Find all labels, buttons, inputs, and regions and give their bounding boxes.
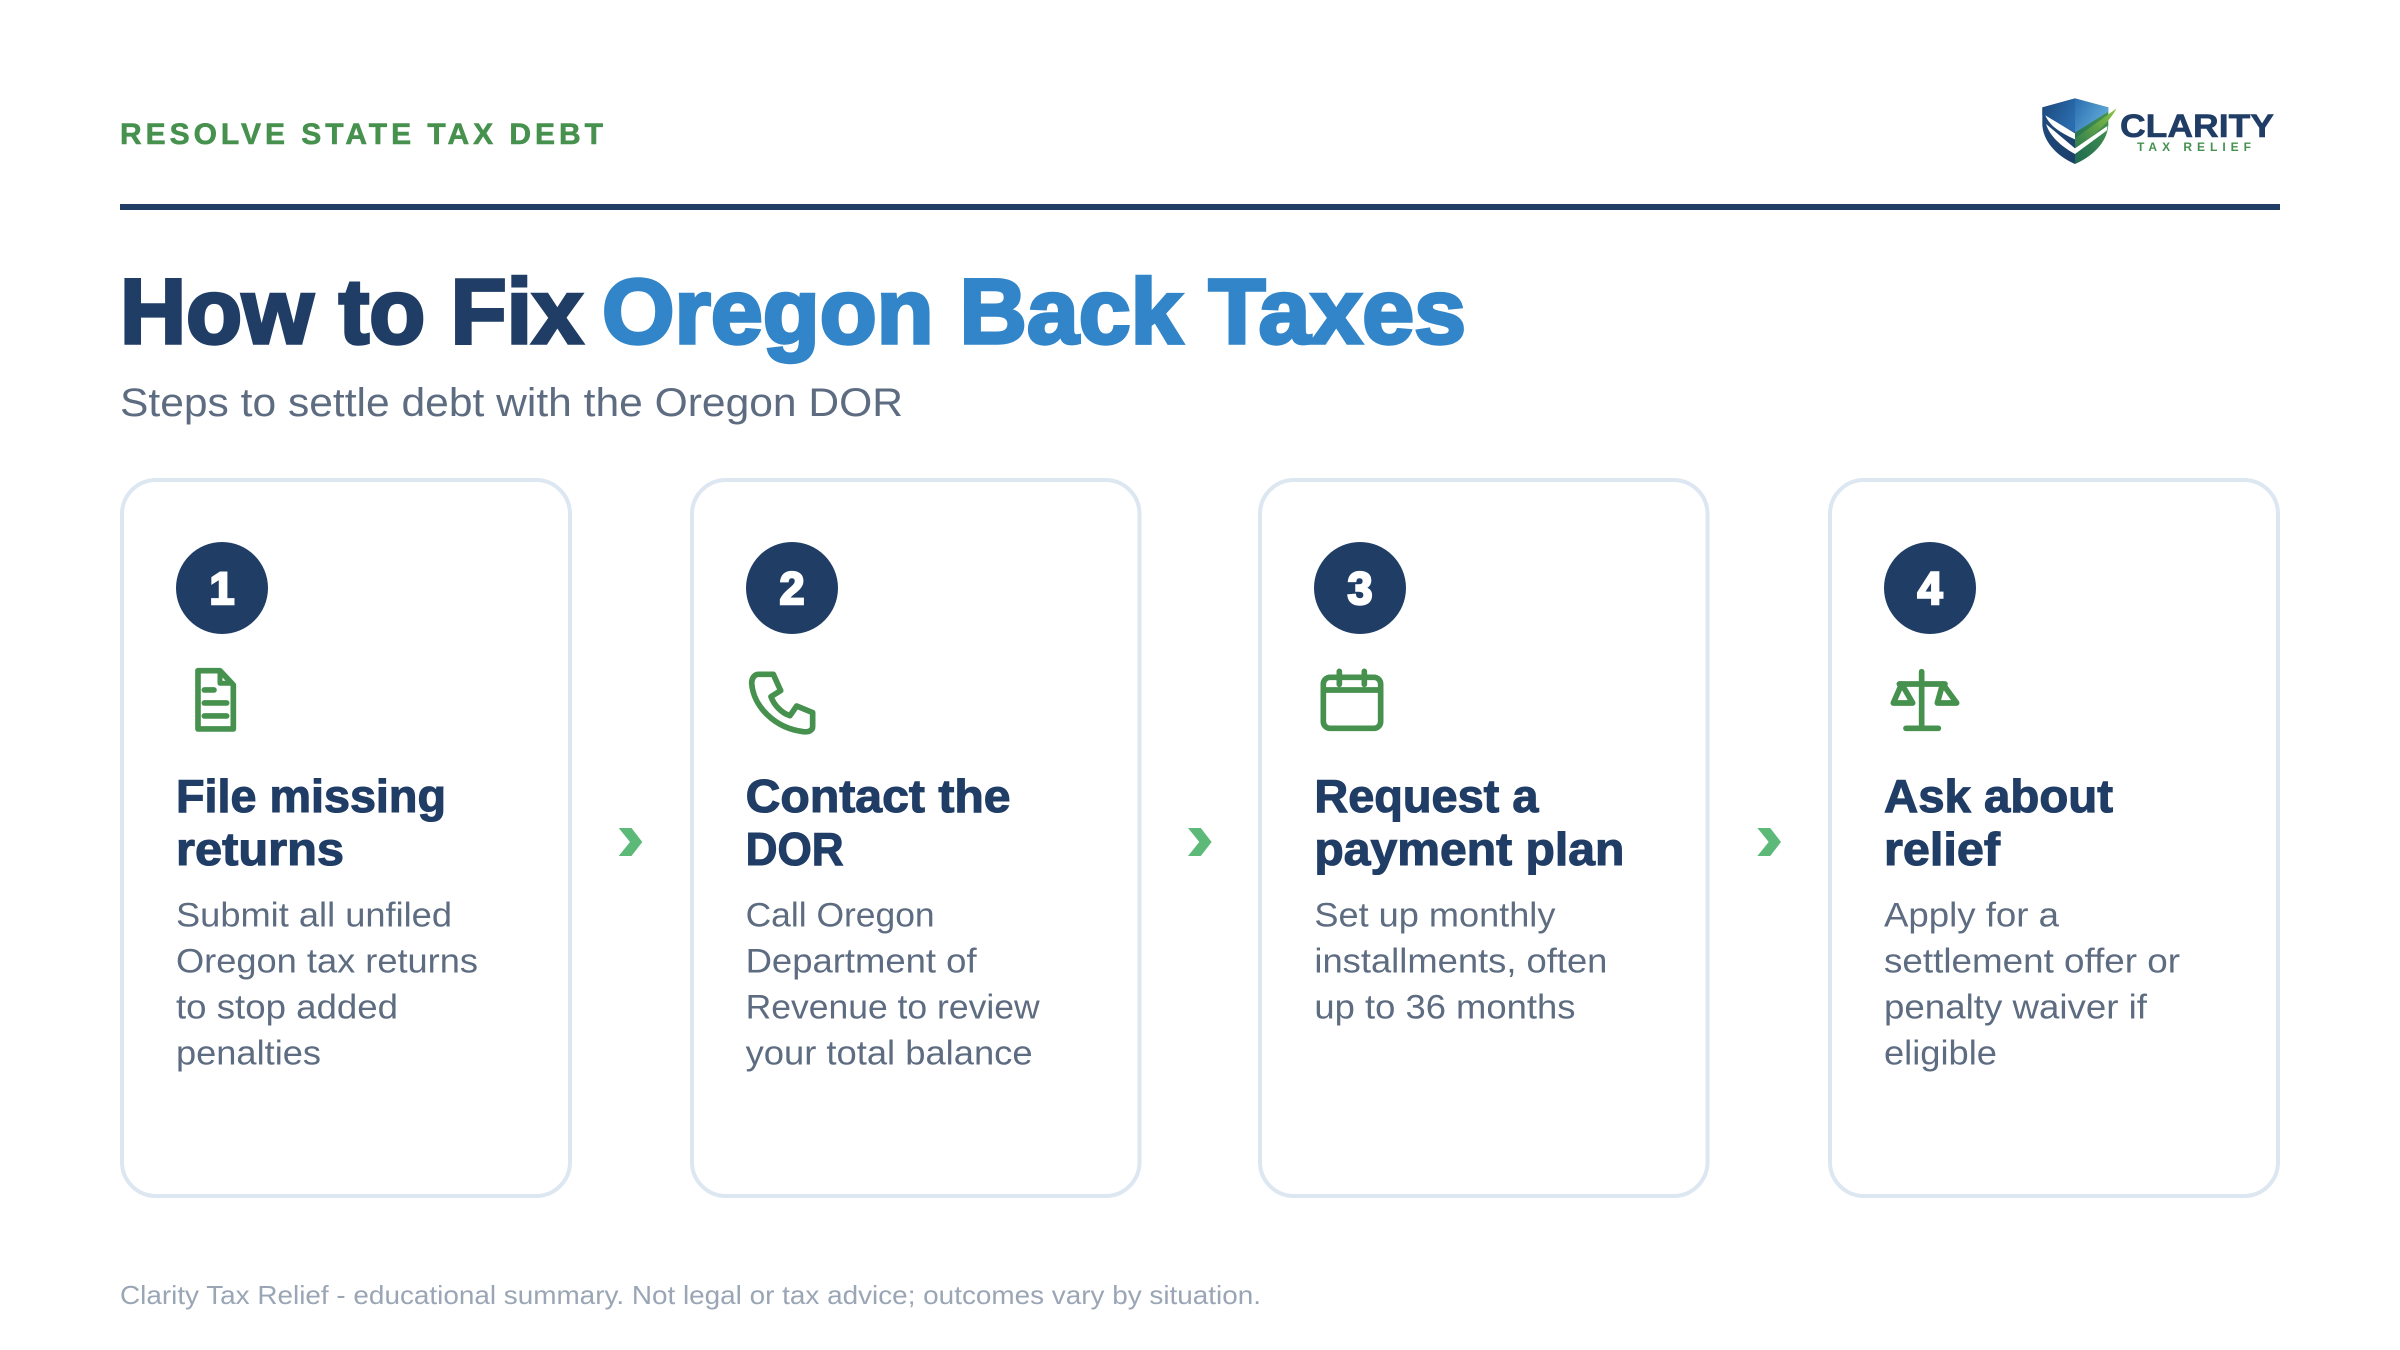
step 1 heading xyxy=(176,770,446,875)
panel: step 1 xyxy=(122,480,570,1196)
logo wordmark: CLARITY xyxy=(2120,108,2274,144)
panel: step 3 xyxy=(1260,480,1708,1196)
step 1 heading: returns xyxy=(176,823,344,875)
icon: phone xyxy=(752,674,813,732)
step 3 description xyxy=(1314,896,1607,1026)
step 3 description: Set up monthly xyxy=(1314,896,1555,934)
step 1 description: to stop added xyxy=(176,988,398,1026)
step 2 heading: Contact the xyxy=(746,770,1011,822)
step number 1 xyxy=(176,542,268,634)
step 2 heading: DOR xyxy=(746,823,844,875)
step 3 heading: Request a xyxy=(1314,770,1539,822)
arrow 2 xyxy=(1188,828,1212,856)
card outline xyxy=(692,480,1140,1196)
step 3 heading: payment plan xyxy=(1314,823,1624,875)
step 4 heading: Ask about xyxy=(1884,770,2113,822)
step 2 description xyxy=(746,896,1040,1072)
logo tagline: TAX RELIEF xyxy=(2137,140,2251,154)
step number 2 xyxy=(746,542,838,634)
title dark part: How to Fix xyxy=(120,261,583,363)
arrow 1 xyxy=(619,828,642,856)
step 3 description: installments, often xyxy=(1314,942,1607,980)
arrow 3 xyxy=(1757,828,1781,856)
card outline xyxy=(1830,480,2278,1196)
step 4 description: settlement offer or xyxy=(1884,942,2180,980)
step 4 heading xyxy=(1884,770,2113,875)
panel: step 2 xyxy=(692,480,1140,1196)
icon: shield with check xyxy=(2042,98,2117,164)
title xyxy=(120,261,1466,363)
step number 4: 4 xyxy=(1917,563,1943,614)
subtitle: Steps to settle debt with the Oregon DOR xyxy=(120,381,903,425)
step 2 description: Department of xyxy=(746,942,977,980)
icon: scales xyxy=(1893,672,1957,728)
step 1 description: penalties xyxy=(176,1034,321,1072)
logo: Clarity Tax Relief xyxy=(2042,98,2274,164)
icon: document xyxy=(198,671,233,729)
step 1 heading: File missing xyxy=(176,770,446,822)
icon: calendar xyxy=(1323,671,1381,728)
card outline xyxy=(122,480,570,1196)
title blue part: Oregon Back Taxes xyxy=(602,261,1466,363)
panel: step 4 xyxy=(1830,480,2278,1196)
step 1 description xyxy=(176,896,478,1072)
step number 3 xyxy=(1314,542,1406,634)
step 4 description: Apply for a xyxy=(1884,896,2059,934)
step 3 heading xyxy=(1314,770,1624,875)
step 1 description: Submit all unfiled xyxy=(176,896,452,934)
step number 1: 1 xyxy=(209,563,235,614)
step 3 description: up to 36 months xyxy=(1314,988,1575,1026)
step 4 description: penalty waiver if xyxy=(1884,988,2148,1026)
step number 4 xyxy=(1884,542,1976,634)
footer disclaimer: Clarity Tax Relief - educational summary. Not legal or tax advice; outcomes vary by situation. xyxy=(120,1280,1261,1310)
step 4 description: eligible xyxy=(1884,1034,1997,1072)
eyebrow heading: RESOLVE STATE TAX DEBT xyxy=(120,118,603,151)
step 2 description: Call Oregon xyxy=(746,896,935,934)
header rule xyxy=(120,204,2280,210)
step 2 description: your total balance xyxy=(746,1034,1033,1072)
step number 2: 2 xyxy=(779,563,805,614)
step 2 heading xyxy=(746,770,1011,875)
step 1 description: Oregon tax returns xyxy=(176,942,478,980)
step 4 description xyxy=(1884,896,2180,1072)
step number 3: 3 xyxy=(1347,563,1373,614)
step 4 heading: relief xyxy=(1884,823,2001,875)
step 2 description: Revenue to review xyxy=(746,988,1040,1026)
card outline xyxy=(1260,480,1708,1196)
